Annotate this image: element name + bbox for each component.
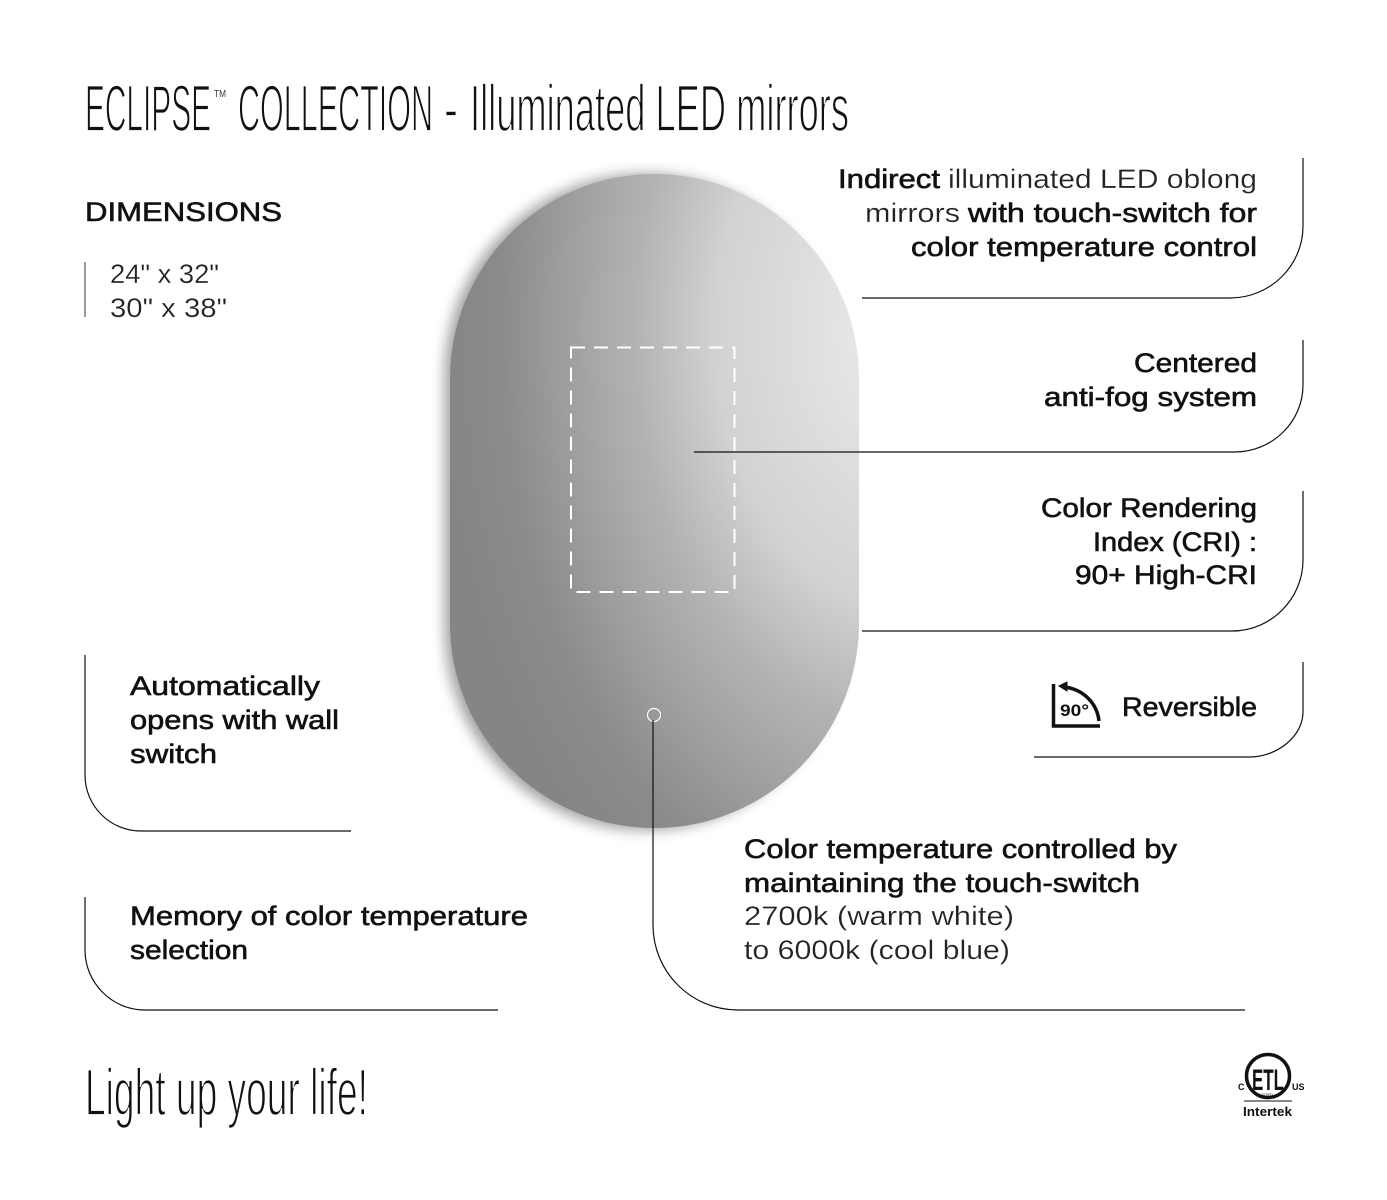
callout: reversible [1034, 662, 1303, 757]
mirror surface [450, 174, 859, 828]
icon: ETL Intertek certification mark: ETL [1252, 1064, 1284, 1097]
icon: ETL Intertek certification mark: C [1238, 1082, 1245, 1092]
callout: CRI: Index (CRI) : [1093, 527, 1257, 557]
callout: indirect illumination: with touch-switch for [967, 198, 1257, 228]
icon: 90 degree rotation: 90° [1060, 701, 1089, 720]
callout: reversible: Reversible [1122, 692, 1257, 722]
callout: CRI [862, 491, 1303, 631]
dimensions list [85, 259, 227, 323]
callout: color temperature control: 2700k (warm white) [744, 901, 1014, 931]
mirror [445, 174, 859, 830]
callout: color temperature control: to 6000k (cool blue) [744, 935, 1010, 965]
callout: indirect illumination: color temperature control [911, 232, 1257, 262]
touch switch [648, 708, 660, 722]
callout: wall switch: switch [130, 739, 217, 769]
callout: color temperature control: maintaining the touch-switch [744, 868, 1140, 898]
callout: CRI: 90+ High-CRI [1075, 560, 1257, 590]
icon: ETL Intertek certification mark [1238, 1054, 1305, 1119]
callout: memory: selection [130, 935, 248, 965]
icon: ETL Intertek certification mark: Intertek [1243, 1104, 1293, 1119]
callout: anti-fog: anti-fog system [1044, 382, 1257, 412]
callout: indirect illumination: Indirect [838, 164, 941, 194]
callout: indirect illumination: mirrors [865, 198, 960, 228]
dimensions heading: DIMENSIONS [85, 197, 282, 227]
title: - [444, 71, 458, 145]
dimensions list: 24" x 32" [110, 259, 219, 289]
callout: anti-fog: Centered [1134, 348, 1257, 378]
icon: ETL Intertek certification mark: LISTED [1259, 1092, 1273, 1097]
icon: 90 degree rotation [1054, 682, 1100, 726]
callout: anti-fog [694, 340, 1303, 452]
mirror shadow [445, 174, 845, 830]
title [85, 71, 849, 145]
slogan: Light up your life! [85, 1055, 368, 1129]
callout: indirect illumination: illuminated LED oblong [948, 164, 1257, 194]
callout: wall switch: Automatically [130, 671, 321, 701]
callout: wall switch: opens with wall [130, 705, 339, 735]
title: Illuminated LED mirrors [470, 71, 849, 145]
callout: indirect illumination [838, 158, 1303, 298]
callout: color temperature control [653, 720, 1245, 1010]
title: ECLIPSE [85, 71, 211, 145]
callout: CRI: Color Rendering [1041, 493, 1257, 523]
callout: wall switch [85, 655, 351, 831]
icon: ETL Intertek certification mark: US [1292, 1082, 1305, 1092]
title: COLLECTION [238, 71, 433, 145]
dimensions list: 30" x 38" [110, 293, 227, 323]
anti-fog dashed zone [571, 348, 734, 592]
title: TM [214, 89, 226, 100]
callout: color temperature control: Color temperature controlled by [744, 834, 1178, 864]
callout: memory [85, 897, 528, 1010]
callout: memory: Memory of color temperature [130, 901, 528, 931]
